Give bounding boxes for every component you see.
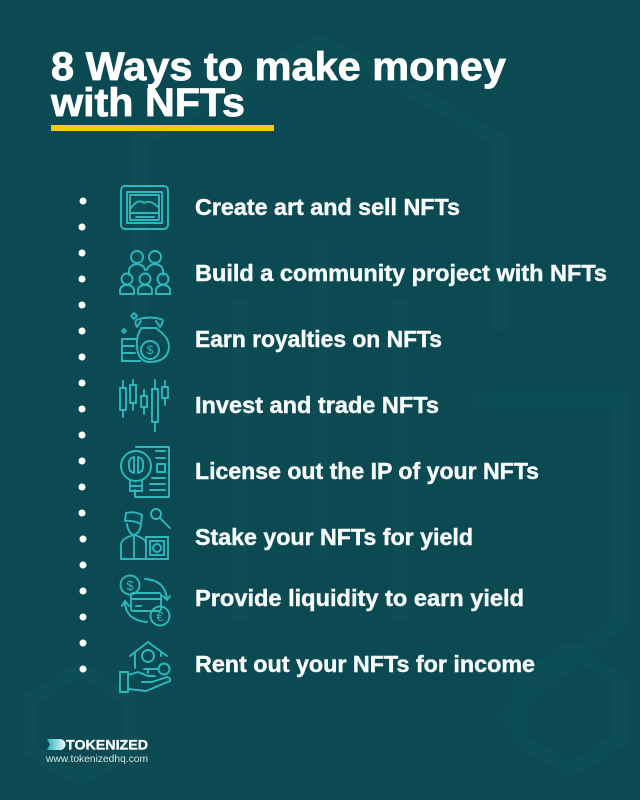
icon: currency exchange <box>120 576 170 626</box>
icon: candlestick chart <box>120 380 168 431</box>
item text: invest: Invest and trade NFTs <box>195 392 439 418</box>
item text: create art: Create art and sell NFTs <box>195 194 460 220</box>
item text: stake: Stake your NFTs for yield <box>195 524 473 550</box>
title <box>50 45 507 125</box>
item text: community: Build a community project with NFTs <box>195 260 607 286</box>
icon: currency exchange: $ <box>126 578 134 593</box>
logo: Tokenized: TOKENIZED <box>66 738 148 752</box>
item text: royalties: Earn royalties on NFTs <box>195 326 442 352</box>
item text: rent: Rent out your NFTs for income <box>195 651 535 677</box>
icon: house in hand with key <box>120 642 170 692</box>
icon: money bag <box>122 313 169 362</box>
icon: framed picture <box>121 186 168 229</box>
item text: license: License out the IP of your NFTs <box>195 458 539 484</box>
icon: money bag: $ <box>147 343 154 357</box>
title: with NFTs <box>50 81 245 125</box>
website url: www.tokenizedhq.com <box>45 753 148 765</box>
icon: idea document <box>121 447 169 497</box>
title underline <box>51 125 274 131</box>
icon: currency exchange: € <box>156 609 164 624</box>
dotted timeline <box>78 198 86 672</box>
title: 8 Ways to make money <box>51 45 507 89</box>
icon: community group <box>120 251 170 294</box>
icon: investor with safe <box>121 509 170 559</box>
item text: liquidity: Provide liquidity to earn yield <box>195 585 524 611</box>
